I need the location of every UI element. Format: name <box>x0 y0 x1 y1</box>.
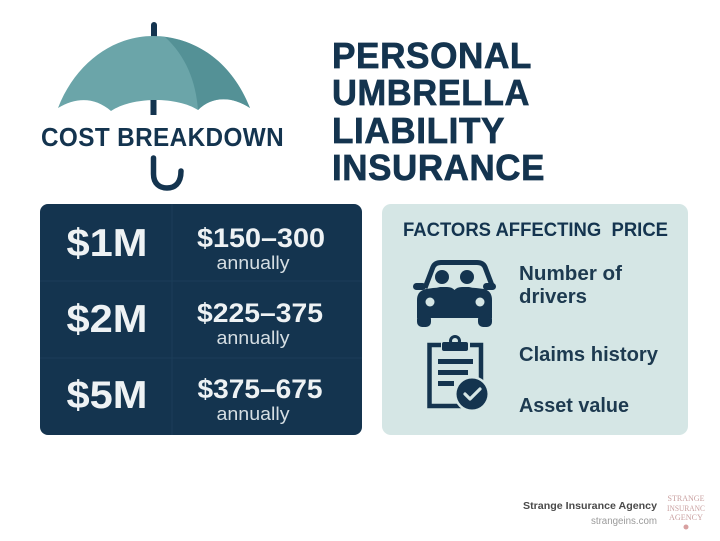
row: $1M: $1M <box>66 222 148 265</box>
row: $5M: annually <box>216 404 290 424</box>
umbrella heading: cost breakdown: COST BREAKDOWN <box>41 122 284 152</box>
title <box>332 35 545 188</box>
factor labels: drivers <box>519 286 587 308</box>
row: $1M: annually <box>216 253 290 273</box>
icon: clipboard with check <box>430 336 490 412</box>
panel: factors affecting price <box>382 204 688 435</box>
footer: agency logo <box>667 493 705 530</box>
factor labels: Claims history <box>519 344 659 366</box>
title: PERSONAL <box>332 35 532 76</box>
row: $2M: annually <box>216 328 290 348</box>
row: $1M: $150–300 <box>197 223 325 253</box>
row: $5M: $375–675 <box>198 374 322 404</box>
row: $2M <box>66 298 323 348</box>
footer: agency credit: Strange Insurance Agency <box>523 500 657 512</box>
title: UMBRELLA <box>332 72 530 113</box>
row: $2M: $2M <box>66 298 148 341</box>
icon: car with two drivers <box>413 262 496 327</box>
factor labels <box>519 263 659 417</box>
footer: agency credit <box>523 500 657 527</box>
factors heading: FACTORS AFFECTING PRICE <box>403 219 668 241</box>
icon: umbrella <box>58 22 250 188</box>
row: $5M <box>66 374 322 424</box>
factor labels: Number of <box>519 263 622 285</box>
title: INSURANCE <box>332 147 545 188</box>
footer: agency logo: AGENCY <box>669 512 703 522</box>
row: $5M: $5M <box>66 374 148 417</box>
row: $1M <box>66 222 325 273</box>
footer: agency logo: INSURANC <box>667 503 705 513</box>
panel: coverage costs <box>40 204 362 435</box>
factor labels: Asset value <box>519 395 629 417</box>
footer: agency logo: STRANGE <box>668 493 704 503</box>
title: LIABILITY <box>332 110 505 151</box>
row: $2M: $225–375 <box>197 298 323 328</box>
footer: agency credit: strangeins.com <box>591 516 657 527</box>
